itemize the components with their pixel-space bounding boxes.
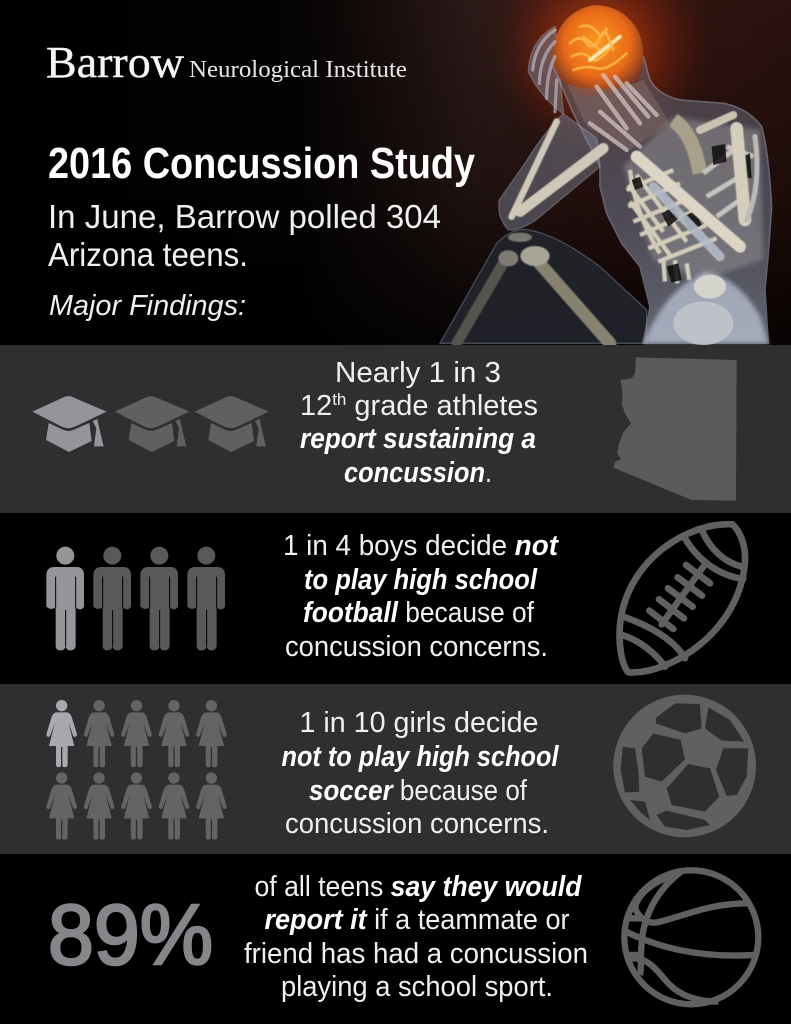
stat text bbox=[244, 871, 588, 1003]
stat text: th bbox=[332, 390, 346, 409]
stat text: concussion. bbox=[344, 457, 492, 489]
panel: boys and football bbox=[0, 513, 791, 684]
torso tint under ribs bbox=[623, 117, 763, 280]
stat text: of all teens say they would bbox=[254, 871, 583, 903]
brain squiggles bbox=[570, 26, 627, 70]
stat text bbox=[300, 357, 538, 489]
stat text: Nearly 1 in 3 bbox=[335, 357, 501, 389]
torso shadow gaps bbox=[632, 144, 752, 283]
intro text: In June, Barrow polled 304 bbox=[48, 198, 441, 235]
right arm bones bbox=[637, 115, 757, 257]
left arm bones bbox=[512, 122, 603, 217]
panel: 12th grade athletes bbox=[0, 345, 791, 513]
stat text: report sustaining a bbox=[300, 423, 536, 455]
stat text: football because of bbox=[303, 597, 535, 629]
body silhouette bbox=[553, 57, 772, 343]
panel: teens would report bbox=[0, 854, 791, 1024]
stat text bbox=[283, 530, 559, 663]
icon: four boys bbox=[46, 547, 225, 650]
leg silhouette bbox=[440, 229, 647, 343]
head bbox=[552, 5, 643, 97]
logo: Barrow Neurological Institute: Neurological Institute bbox=[189, 57, 407, 83]
icon: football bbox=[620, 524, 745, 672]
title: 2016 Concussion Study bbox=[48, 139, 475, 188]
stat text: playing a school sport. bbox=[281, 971, 553, 1003]
icon: Arizona map bbox=[613, 357, 737, 501]
stat text: to play high school bbox=[304, 564, 538, 596]
icon: ten girls bbox=[46, 700, 227, 839]
pelvis bbox=[643, 272, 768, 345]
icon: graduation caps bbox=[32, 396, 269, 452]
fingers on head bbox=[533, 30, 557, 112]
stat text: not to play high school bbox=[282, 741, 559, 773]
stat text: soccer because of bbox=[309, 775, 528, 807]
stat text: report it if a teammate or bbox=[264, 904, 570, 936]
icon: basketball bbox=[624, 870, 758, 1004]
stat text: 1 in 4 boys decide not bbox=[283, 530, 559, 562]
panel: girls and soccer bbox=[0, 684, 791, 854]
stat text: concussion concerns. bbox=[285, 808, 549, 840]
header background bbox=[0, 0, 791, 345]
logo: Barrow Neurological Institute bbox=[46, 38, 407, 87]
intro text: Arizona teens. bbox=[48, 236, 248, 273]
stat text: concussion concerns. bbox=[285, 631, 548, 663]
thigh and shin bones bbox=[457, 233, 610, 343]
stat text bbox=[282, 707, 559, 840]
intro text bbox=[48, 198, 441, 273]
icon: soccer ball bbox=[613, 695, 756, 837]
big number 89%: 89% bbox=[48, 888, 213, 983]
logo: Barrow Neurological Institute: Barrow bbox=[46, 38, 184, 87]
subheading: major findings: Major Findings: bbox=[49, 290, 246, 322]
illustration: skeleton figure with glowing brain bbox=[440, 0, 772, 345]
stat text: grade athletes bbox=[346, 390, 538, 422]
stat text: 1 in 10 girls decide bbox=[300, 707, 538, 739]
face and covering hand bbox=[567, 80, 670, 150]
left arm skin bbox=[499, 27, 600, 230]
rib cage bbox=[627, 120, 753, 283]
stat text: friend has had a concussion bbox=[244, 938, 588, 970]
stat text: 12 bbox=[300, 390, 332, 422]
